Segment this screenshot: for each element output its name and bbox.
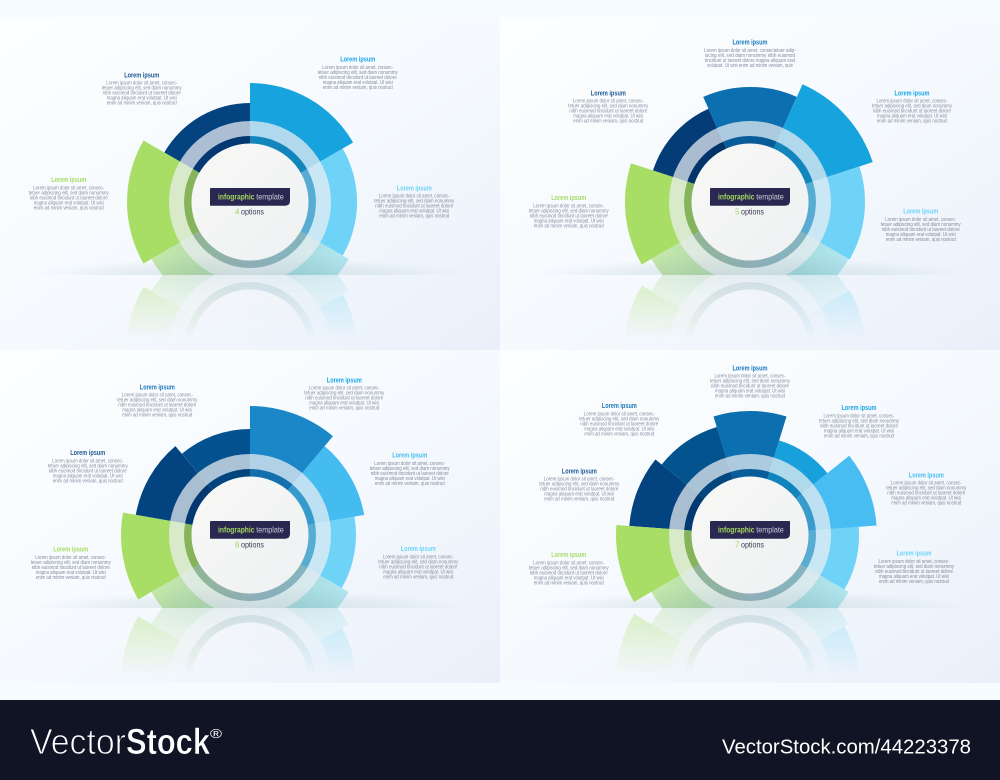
text block: light blue: enim ad minim veniam, quis nostrud xyxy=(879,579,949,585)
text block: blue: tetuer adipiscing elit, sed diam nonummy xyxy=(819,418,899,424)
text block: navy xyxy=(48,450,128,484)
text block: navy: Lorem ipsum dolor sit amet, consec- xyxy=(52,458,123,464)
text block: sky blue: enim ad minim veniam, quis nostrud xyxy=(375,481,445,487)
text block: navy xyxy=(539,468,620,503)
sector: green xyxy=(121,513,250,600)
option count: options xyxy=(741,207,764,216)
sector: mid blue xyxy=(250,406,333,490)
chart: 6 option radial xyxy=(121,406,364,649)
banner background xyxy=(0,700,1000,780)
floor shadow xyxy=(530,591,970,608)
sector: light blue xyxy=(250,517,356,588)
text block: light blue: Lorem ipsum xyxy=(401,546,436,553)
translucent white ring xyxy=(176,128,324,276)
text block: top: tincidunt ut laoreet dolore magna aliquam erat xyxy=(705,58,796,64)
text block: light blue: nibh euismod tincidunt ut laoreet dolore xyxy=(379,564,457,570)
text block: bright blue: enim ad minim veniam, quis nostrud xyxy=(877,119,947,125)
text block: bright blue: magna aliquam erat volutpat. Ut wisi xyxy=(877,114,947,120)
text block: navy: nibh euismod tincidunt ut laoreet dolore xyxy=(103,91,181,97)
text block: light blue: Lorem ipsum xyxy=(397,185,432,192)
translucent white ring xyxy=(176,462,324,608)
text block: navy upper: Lorem ipsum xyxy=(602,403,637,410)
chart: 4 option radial xyxy=(127,83,357,316)
chart: 5 option radial xyxy=(625,84,873,316)
footer banner xyxy=(0,700,1000,780)
text block: bright blue: nibh euismod tincidunt ut laoreet dolore xyxy=(319,75,397,81)
sector: navy upper xyxy=(662,427,750,535)
text block: green xyxy=(529,195,609,229)
sector: pale cyan base xyxy=(750,535,849,649)
text block: bright blue xyxy=(318,57,398,91)
text block: light blue: tetuer adipiscing elit, sed diam nonummy xyxy=(881,222,961,228)
text block: mid blue: magna aliquam erat volutpat. Ut wisi xyxy=(309,401,379,407)
text block: light blue: magna aliquam erat volutpat. Ut wisi xyxy=(879,574,949,580)
text block: green: magna aliquam erat volutpat. Ut wisi xyxy=(36,570,106,576)
panel background xyxy=(0,17,500,350)
center label xyxy=(710,188,790,216)
text block: sky blue: nibh euismod tincidunt ut laoreet dolore xyxy=(887,491,965,497)
center disc xyxy=(692,476,808,594)
text block: green: Lorem ipsum dolor sit amet, consec- xyxy=(533,203,604,209)
text block: green: tetuer adipiscing elit, sed diam nonummy xyxy=(529,208,609,214)
text block: bright blue: enim ad minim veniam, quis nostrud xyxy=(323,85,393,91)
text block: light blue: nibh euismod tincidunt ut laoreet dolore xyxy=(882,227,960,233)
center disc xyxy=(192,144,308,260)
label title: template xyxy=(756,525,784,534)
center disc xyxy=(692,144,808,260)
text block: light blue: nibh euismod tincidunt ut laoreet dolore xyxy=(875,569,953,575)
text block: light blue: magna aliquam erat volutpat. Ut wisi xyxy=(886,232,956,238)
sector: pale cyan base xyxy=(250,231,348,316)
sector: bright blue xyxy=(250,83,353,173)
text block: blue: Lorem ipsum dolor sit amet, consec- xyxy=(824,413,895,419)
center disc xyxy=(192,476,308,594)
text block: light blue xyxy=(881,209,961,243)
sector: pale green base xyxy=(151,231,250,318)
text block: mid blue: Lorem ipsum xyxy=(327,377,362,384)
text block: top: magna aliquam erat volutpat. Ut wisi xyxy=(715,389,785,395)
chart: 7 option radial xyxy=(616,411,877,649)
sector: pale cyan base xyxy=(250,564,348,651)
text block: light blue: enim ad minim veniam, quis nostrud xyxy=(379,214,449,220)
text block: bright blue: Lorem ipsum xyxy=(894,90,930,97)
sector: navy xyxy=(136,446,212,525)
text block: navy: enim ad minim veniam, quis nostrud xyxy=(544,497,614,503)
text block: top: volutpat. Ut wisi enim ad minim veniam, quis xyxy=(707,63,793,69)
center label xyxy=(210,188,290,216)
text block: green xyxy=(29,177,109,211)
text block: sky blue: magna aliquam erat volutpat. Ut wisi xyxy=(891,496,961,502)
text block: light blue xyxy=(378,546,459,580)
center label xyxy=(710,521,790,549)
sector: navy upper xyxy=(182,429,250,490)
text block: navy: tetuer adipiscing elit, sed diam nonummy xyxy=(102,86,182,92)
label title: infographic xyxy=(218,192,255,201)
text block: navy: tetuer adipiscing elit, sed diam nonummy xyxy=(539,482,620,488)
text block: mid blue: tetuer adipiscing elit, sed diam nonummy xyxy=(304,391,385,397)
inner shaded ring xyxy=(188,473,312,597)
sector: navy xyxy=(629,460,750,535)
text block: sky blue: Lorem ipsum dolor sit amet, consec- xyxy=(891,481,962,487)
text block: green: Lorem ipsum dolor sit amet, consec- xyxy=(533,560,604,566)
text block: sky blue: Lorem ipsum xyxy=(909,472,944,479)
text block: navy: tetuer adipiscing elit, sed diam nonummy xyxy=(48,463,128,469)
panel: 5 options xyxy=(528,39,1000,350)
sector: pale green base xyxy=(152,564,250,652)
sector: navy xyxy=(164,103,250,173)
text block: navy: tetuer adipiscing elit, sed diam nonummy xyxy=(568,104,649,110)
panel: 6 options xyxy=(30,377,500,683)
text block: top: nibh euismod tincidunt ut laoreet dolore xyxy=(711,384,789,390)
text block: light blue: enim ad minim veniam, quis nostrud xyxy=(383,574,453,580)
text block: light blue: tetuer adipiscing elit, sed diam nonummy xyxy=(874,564,954,570)
text block: green: Lorem ipsum xyxy=(551,195,586,202)
floor shading xyxy=(156,264,344,275)
text block: sky blue xyxy=(886,472,967,507)
text block: top: Lorem ipsum dolor sit amet, consectetuer adip- xyxy=(704,48,796,54)
text block: sky blue: nibh euismod tincidunt ut laoreet dolore xyxy=(371,471,449,477)
text block: blue: nibh euismod tincidunt ut laoreet dolore xyxy=(820,423,898,429)
text block: navy upper: Lorem ipsum dolor sit amet, consec- xyxy=(122,393,193,399)
text block: light blue: Lorem ipsum dolor sit amet, consec- xyxy=(379,194,450,200)
text block: navy upper: nibh euismod tincidunt ut laoreet dolore xyxy=(118,403,196,409)
floor shading xyxy=(156,596,344,608)
text block: navy: enim ad minim veniam, quis nostrud xyxy=(53,478,123,484)
panel background xyxy=(0,350,500,683)
text block: mid blue: enim ad minim veniam, quis nostrud xyxy=(309,406,379,412)
logo: VectorStock: Vector xyxy=(30,721,126,762)
label title: template xyxy=(256,525,284,534)
text block: green: magna aliquam erat volutpat. Ut wisi xyxy=(534,218,604,224)
floor shading xyxy=(651,535,849,649)
sector: pale green base xyxy=(651,232,750,318)
text block: navy: Lorem ipsum xyxy=(124,72,159,79)
text block: light blue xyxy=(874,551,954,585)
label badge xyxy=(210,188,290,206)
text block: top xyxy=(704,40,796,69)
text block: green: nibh euismod tincidunt ut laoreet dolore xyxy=(32,565,110,571)
label title: template xyxy=(256,192,284,201)
text block: green: enim ad minim veniam, quis nostrud xyxy=(534,580,604,586)
text block: green: enim ad minim veniam, quis nostrud xyxy=(36,575,106,581)
option count: options xyxy=(241,207,264,216)
text block: light blue xyxy=(374,185,455,220)
option count: 7 xyxy=(735,540,740,549)
sector: mid blue xyxy=(703,87,797,149)
text block: green: Lorem ipsum xyxy=(53,547,88,554)
text block: sky blue: enim ad minim veniam, quis nostrud xyxy=(891,501,961,507)
text block: navy upper xyxy=(579,403,660,437)
text block: top: iscing elit, sed diam nonummy nibh euismod xyxy=(705,53,795,59)
sector: green xyxy=(616,525,750,602)
floor shadow xyxy=(30,258,470,275)
chart reflection xyxy=(616,567,877,780)
text block: sky blue: tetuer adipiscing elit, sed diam nonummy xyxy=(886,486,967,492)
text block: navy xyxy=(102,72,182,107)
option count: 6 xyxy=(235,540,240,549)
text block: bright blue xyxy=(872,90,952,125)
text block: navy xyxy=(568,90,649,125)
sector: navy xyxy=(653,108,726,184)
sector: pale cyan base xyxy=(750,231,848,316)
text block: green: Lorem ipsum xyxy=(551,552,586,559)
label badge xyxy=(710,188,790,206)
panel: 7 options xyxy=(500,350,1000,780)
text block: top: Lorem ipsum xyxy=(732,40,768,47)
floor shadow xyxy=(30,591,470,608)
floor shadow xyxy=(530,258,970,275)
text block: navy: nibh euismod tincidunt ut laoreet dolore xyxy=(49,468,127,474)
text block: blue: magna aliquam erat volutpat. Ut wisi xyxy=(824,428,894,434)
text block: mid blue: Lorem ipsum dolor sit amet, consec- xyxy=(309,386,380,392)
text block: green: Lorem ipsum dolor sit amet, consec- xyxy=(33,185,104,191)
sector: green xyxy=(625,163,750,264)
text block: bright blue: tetuer adipiscing elit, sed diam nonummy xyxy=(872,104,952,110)
floor shading xyxy=(656,264,844,275)
text block: navy upper: Lorem ipsum xyxy=(140,384,175,391)
inner shaded ring xyxy=(688,140,812,264)
text block: light blue: enim ad minim veniam, quis nostrud xyxy=(886,237,956,243)
text block: navy: enim ad minim veniam, quis nostrud xyxy=(573,119,643,125)
text block: top: Lorem ipsum dolor sit amet, consec- xyxy=(714,374,786,380)
sector: blue xyxy=(750,440,827,535)
center label xyxy=(210,521,290,549)
option count: options xyxy=(241,540,264,549)
text block: navy: magna aliquam erat volutpat. Ut wisi xyxy=(544,492,614,498)
text block: green: nibh euismod tincidunt ut laoreet dolore xyxy=(30,195,108,201)
sector: green xyxy=(127,140,250,264)
text block: green: Lorem ipsum dolor sit amet, consec- xyxy=(35,555,106,561)
text block: navy upper: magna aliquam erat volutpat. Ut wisi xyxy=(584,426,654,432)
text block: navy: Lorem ipsum dolor sit amet, consec- xyxy=(573,99,644,105)
text block: top: tetuer adipiscing elit, sed diam nonummy xyxy=(710,379,790,385)
logo: VectorStock: ® xyxy=(210,726,223,741)
sector: light blue xyxy=(250,148,357,256)
text block: light blue: nibh euismod tincidunt ut laoreet dolore xyxy=(375,204,453,210)
option count: 4 xyxy=(235,207,240,216)
label title: infographic xyxy=(718,192,755,201)
text block: navy: magna aliquam erat volutpat. Ut wisi xyxy=(573,114,643,120)
panel background xyxy=(500,17,1000,350)
text block: bright blue: Lorem ipsum dolor sit amet, consec- xyxy=(322,65,393,71)
label title: template xyxy=(756,192,784,201)
text block: navy: enim ad minim veniam, quis nostrud xyxy=(107,101,177,107)
text block: blue xyxy=(819,405,899,439)
text block: light blue: Lorem ipsum xyxy=(896,551,932,558)
text block: green: tetuer adipiscing elit, sed diam nonummy xyxy=(529,565,609,571)
text block: light blue: Lorem ipsum xyxy=(903,209,938,216)
panel background xyxy=(500,350,1000,683)
text block: light blue: Lorem ipsum dolor sit amet, consec- xyxy=(878,559,950,565)
text block: blue: enim ad minim veniam, quis nostrud xyxy=(824,433,894,439)
chart reflection xyxy=(121,567,364,780)
inner shaded ring xyxy=(188,140,312,264)
text block: top: enim ad minim veniam, quis nostrud xyxy=(715,394,785,400)
panel: 4 options xyxy=(28,56,500,350)
option count: 5 xyxy=(735,207,740,216)
sector: light blue xyxy=(750,166,865,260)
sector: light blue xyxy=(750,527,859,590)
text block: bright blue: nibh euismod tincidunt ut laoreet dolore xyxy=(873,109,951,115)
text block: navy: magna aliquam erat volutpat. Ut wisi xyxy=(107,96,177,102)
text block: navy upper: Lorem ipsum dolor sit amet, consec- xyxy=(584,411,655,417)
sector: pale green base xyxy=(651,535,750,649)
sector: bright blue xyxy=(774,84,873,184)
text block: light blue: tetuer adipiscing elit, sed diam nonummy xyxy=(378,559,459,565)
logo: VectorStock xyxy=(30,721,223,762)
logo: VectorStock: Stock xyxy=(126,721,211,762)
text block: navy: nibh euismod tincidunt ut laoreet dolore xyxy=(540,487,618,493)
text block: sky blue xyxy=(370,453,450,487)
text block: green xyxy=(529,552,609,586)
text block: bright blue: magna aliquam erat volutpat. Ut wisi xyxy=(323,80,393,86)
label title: infographic xyxy=(218,525,255,534)
text block: sky blue: tetuer adipiscing elit, sed diam nonummy xyxy=(370,466,450,472)
text block: navy: Lorem ipsum xyxy=(70,450,105,457)
text block: sky blue: Lorem ipsum xyxy=(392,453,427,460)
text block: navy upper: tetuer adipiscing elit, sed diam nonummy xyxy=(117,398,198,404)
label badge xyxy=(210,521,290,539)
text block: navy upper: enim ad minim veniam, quis nostrud xyxy=(122,413,192,419)
chart reflection xyxy=(626,275,863,332)
translucent white ring xyxy=(676,462,824,608)
text block: navy upper: enim ad minim veniam, quis nostrud xyxy=(584,431,654,437)
text block: navy: Lorem ipsum dolor sit amet, consec- xyxy=(106,81,177,87)
text block: green: magna aliquam erat volutpat. Ut wisi xyxy=(534,575,604,581)
text block: sky blue: magna aliquam erat volutpat. Ut wisi xyxy=(375,476,445,482)
sector: sky blue xyxy=(288,446,364,525)
text block: bright blue: Lorem ipsum dolor sit amet, consec- xyxy=(876,99,948,105)
text block: green: enim ad minim veniam, quis nostrud xyxy=(34,205,104,211)
text block: navy: Lorem ipsum xyxy=(591,90,626,97)
text block: navy: magna aliquam erat volutpat. Ut wisi xyxy=(53,473,123,479)
text block: light blue: Lorem ipsum dolor sit amet, consec- xyxy=(383,554,454,560)
text block: mid blue xyxy=(304,377,385,412)
text block: light blue: magna aliquam erat volutpat. Ut wisi xyxy=(383,569,453,575)
text block: green: nibh euismod tincidunt ut laoreet dolore xyxy=(530,213,608,219)
text block: green: nibh euismod tincidunt ut laoreet dolore xyxy=(530,570,608,576)
text block: green: magna aliquam erat volutpat. Ut wisi xyxy=(34,200,104,206)
label badge xyxy=(710,521,790,539)
text block: navy upper xyxy=(117,384,198,419)
text block: bright blue: tetuer adipiscing elit, sed diam nonummy xyxy=(318,70,398,76)
text block: light blue: Lorem ipsum dolor sit amet, consec- xyxy=(885,217,956,223)
text block: bright blue: Lorem ipsum xyxy=(340,57,375,64)
text block: navy: Lorem ipsum xyxy=(562,468,597,475)
text block: navy upper: magna aliquam erat volutpat. Ut wisi xyxy=(122,408,192,414)
text block: top: Lorem ipsum xyxy=(732,365,768,372)
text block: light blue: tetuer adipiscing elit, sed diam nonummy xyxy=(374,199,455,205)
text block: navy: nibh euismod tincidunt ut laoreet dolore xyxy=(569,109,647,115)
text block: navy upper: tetuer adipiscing elit, sed diam nonummy xyxy=(579,416,660,422)
inner shaded ring xyxy=(688,473,812,597)
text block: mid blue: nibh euismod tincidunt ut laoreet dolore xyxy=(305,396,383,402)
text block: navy: Lorem ipsum dolor sit amet, consec- xyxy=(544,477,615,483)
image id: VectorStock.com/44223378 xyxy=(722,736,971,758)
chart reflection xyxy=(128,275,355,332)
text block: blue: Lorem ipsum xyxy=(842,405,876,412)
text block: navy upper: nibh euismod tincidunt ut laoreet dolore xyxy=(580,421,658,427)
option count: options xyxy=(741,540,764,549)
text block: green: enim ad minim veniam, quis nostrud xyxy=(534,223,604,229)
text block: sky blue: Lorem ipsum dolor sit amet, consec- xyxy=(374,461,445,467)
text block: green: Lorem ipsum xyxy=(51,177,86,184)
text block: light blue: magna aliquam erat volutpat. Ut wisi xyxy=(379,209,449,215)
translucent white ring xyxy=(676,128,824,276)
text block: green: tetuer adipiscing elit, sed diam nonummy xyxy=(29,190,109,196)
text block: top xyxy=(710,365,790,400)
sector: sky blue xyxy=(750,456,877,535)
text block: green xyxy=(31,547,111,581)
sector: top blue xyxy=(714,411,786,535)
text block: green: tetuer adipiscing elit, sed diam nonummy xyxy=(31,560,111,566)
label title: infographic xyxy=(718,525,755,534)
